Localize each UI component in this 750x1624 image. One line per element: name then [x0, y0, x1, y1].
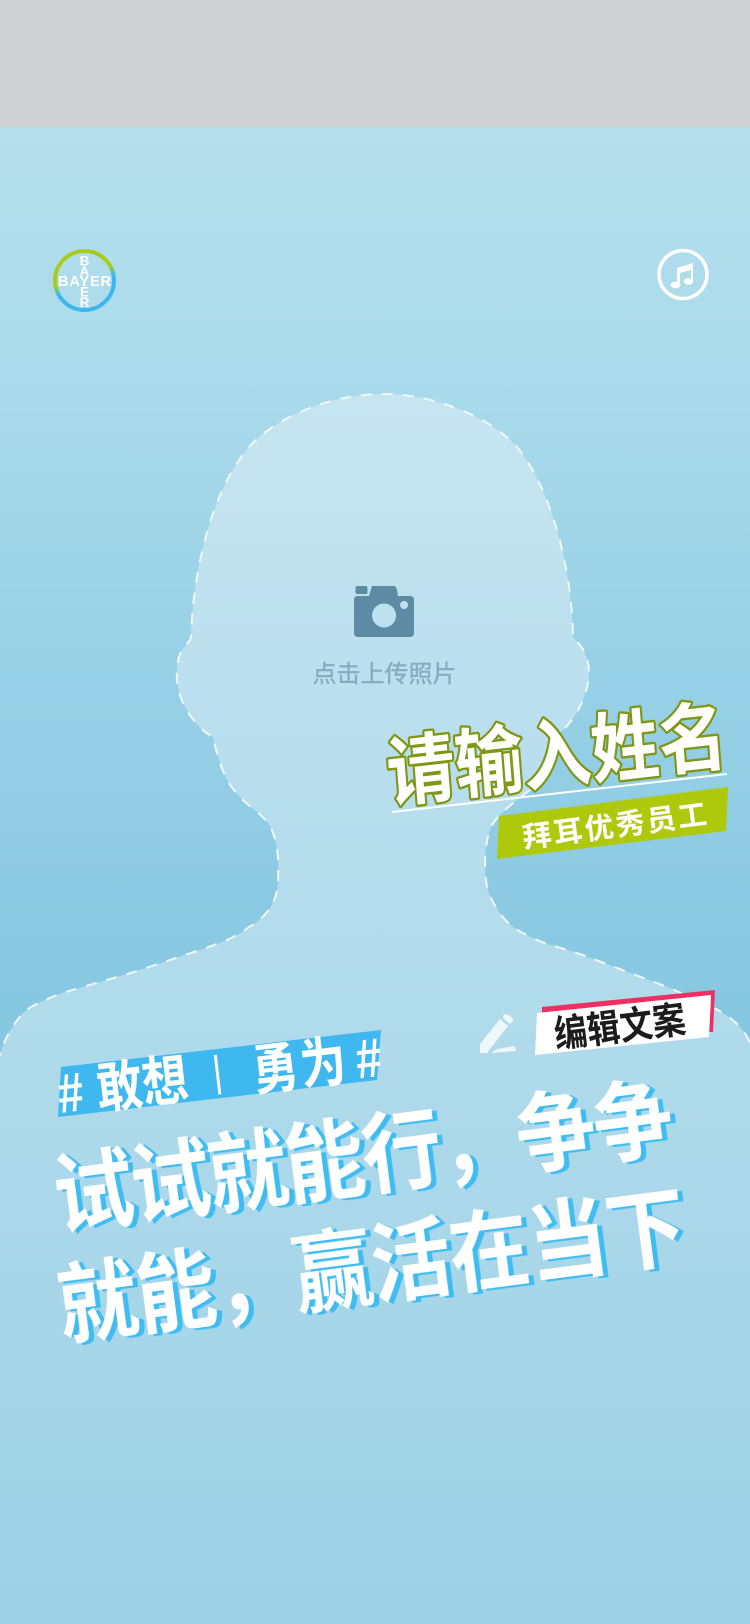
- icon: Bayer logo: A: [80, 264, 90, 278]
- upload hint text: 点击上传照片: [312, 661, 456, 688]
- top grey bar: [0, 0, 750, 127]
- name underline: [392, 774, 727, 812]
- job title tag: 拜耳优秀员工: [521, 798, 711, 855]
- hashtag tag: 丨: [197, 1051, 239, 1103]
- slogan line 1: 试试就能行，争争: [48, 1069, 677, 1247]
- hashtag tag: #敢想: [54, 1048, 192, 1125]
- hashtag tag: 勇为#: [249, 1026, 385, 1102]
- edit copy button: 编辑文案: [552, 998, 688, 1056]
- portrait silhouette upload area: [0, 394, 750, 1624]
- hashtag tag: [54, 1026, 385, 1125]
- name heading: 请输入姓名: [384, 694, 730, 817]
- name heading: 请输入姓名: [384, 694, 730, 817]
- job title tag: [497, 787, 728, 859]
- icon: Bayer logo: BAYER: [58, 274, 112, 290]
- edit copy button: [535, 990, 715, 1056]
- slogan line 2: 就能，赢活在当下: [52, 1178, 691, 1357]
- icon: camera: [354, 586, 414, 637]
- icon: Bayer logo: R: [80, 295, 90, 310]
- icon: Bayer logo: E: [80, 284, 89, 300]
- icon: Bayer logo: B: [80, 254, 90, 268]
- icon: Bayer logo: [55, 251, 114, 310]
- icon: music toggle: [659, 250, 707, 298]
- icon: pencil: [480, 1014, 516, 1053]
